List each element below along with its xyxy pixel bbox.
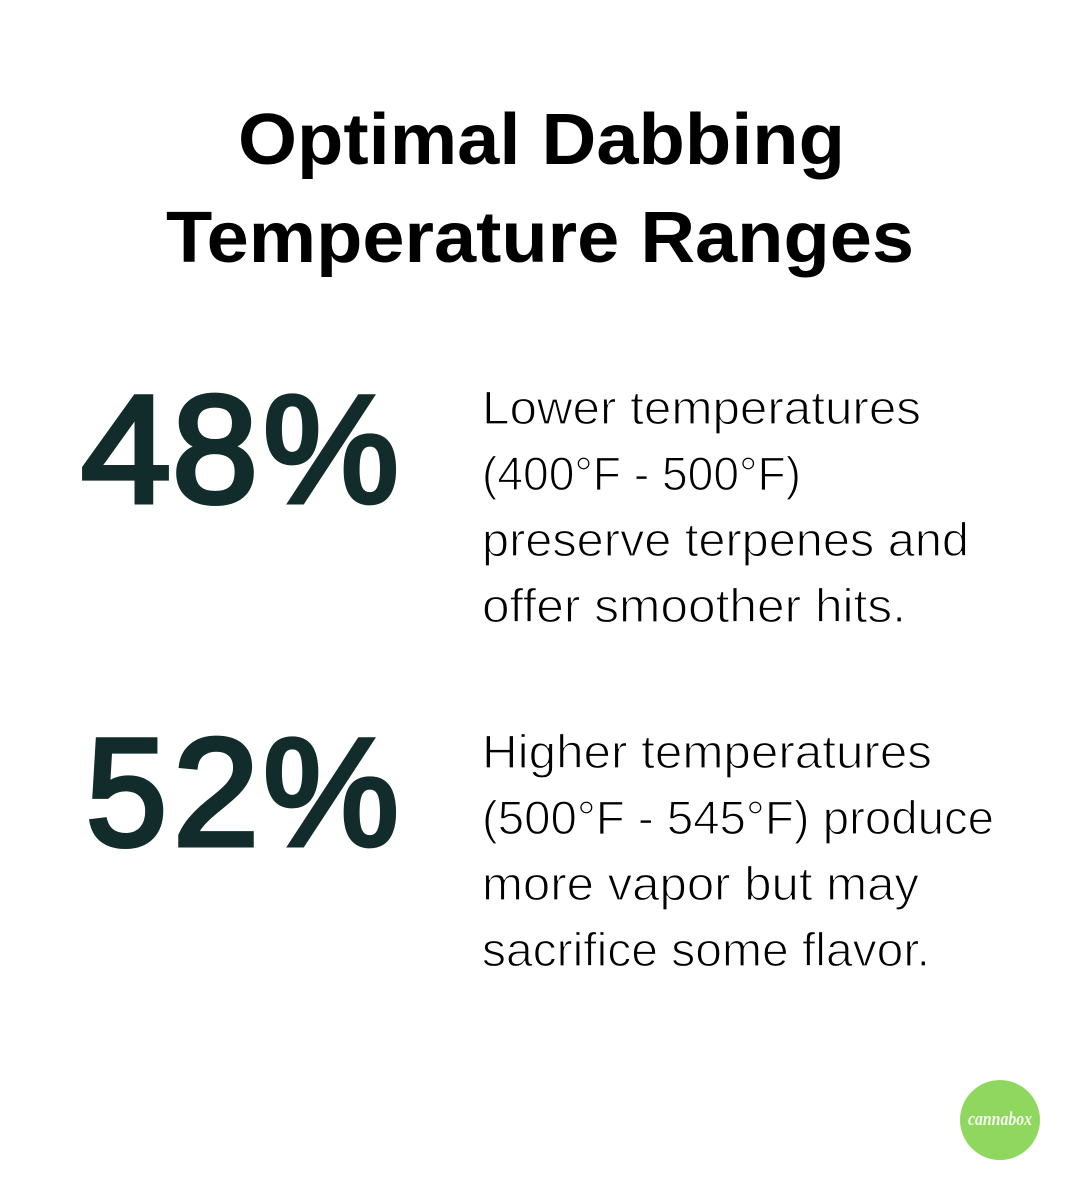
text block: lower temperatures description: Lower temperatures: [482, 381, 921, 434]
text block: lower temperatures description: (400°F - 500°F): [482, 447, 801, 500]
text block: higher temperatures description: more vapor but may: [482, 857, 920, 910]
title: [166, 100, 914, 278]
text block: lower temperatures description: offer smoother hits.: [482, 579, 906, 632]
statistic: 48%: 8: [172, 364, 258, 535]
title: Optimal Dabbing: [238, 100, 845, 180]
text block: higher temperatures description: [482, 725, 994, 976]
panel: lower temperatures: [81, 364, 969, 632]
statistic: 48%: [81, 364, 399, 535]
panel: higher temperatures: [86, 707, 994, 976]
icon: cannabox logo: [960, 1080, 1040, 1160]
text block: higher temperatures description: sacrifice some flavor.: [482, 923, 930, 976]
icon: cannabox logo: cannabox: [968, 1109, 1032, 1130]
text block: higher temperatures description: Higher temperatures: [482, 725, 932, 778]
text block: lower temperatures description: [482, 381, 969, 632]
statistic: 48%: 4: [81, 364, 171, 535]
statistic: 52%: [86, 707, 399, 878]
text block: lower temperatures description: preserve terpenes and: [482, 513, 969, 566]
statistic: 48%: %: [263, 364, 399, 535]
title: Temperature Ranges: [166, 198, 914, 278]
statistic: 52%: 2: [173, 707, 259, 878]
statistic: 52%: %: [263, 707, 399, 878]
text block: higher temperatures description: (500°F - 545°F) produce: [482, 791, 994, 844]
statistic: 52%: 5: [86, 707, 167, 878]
